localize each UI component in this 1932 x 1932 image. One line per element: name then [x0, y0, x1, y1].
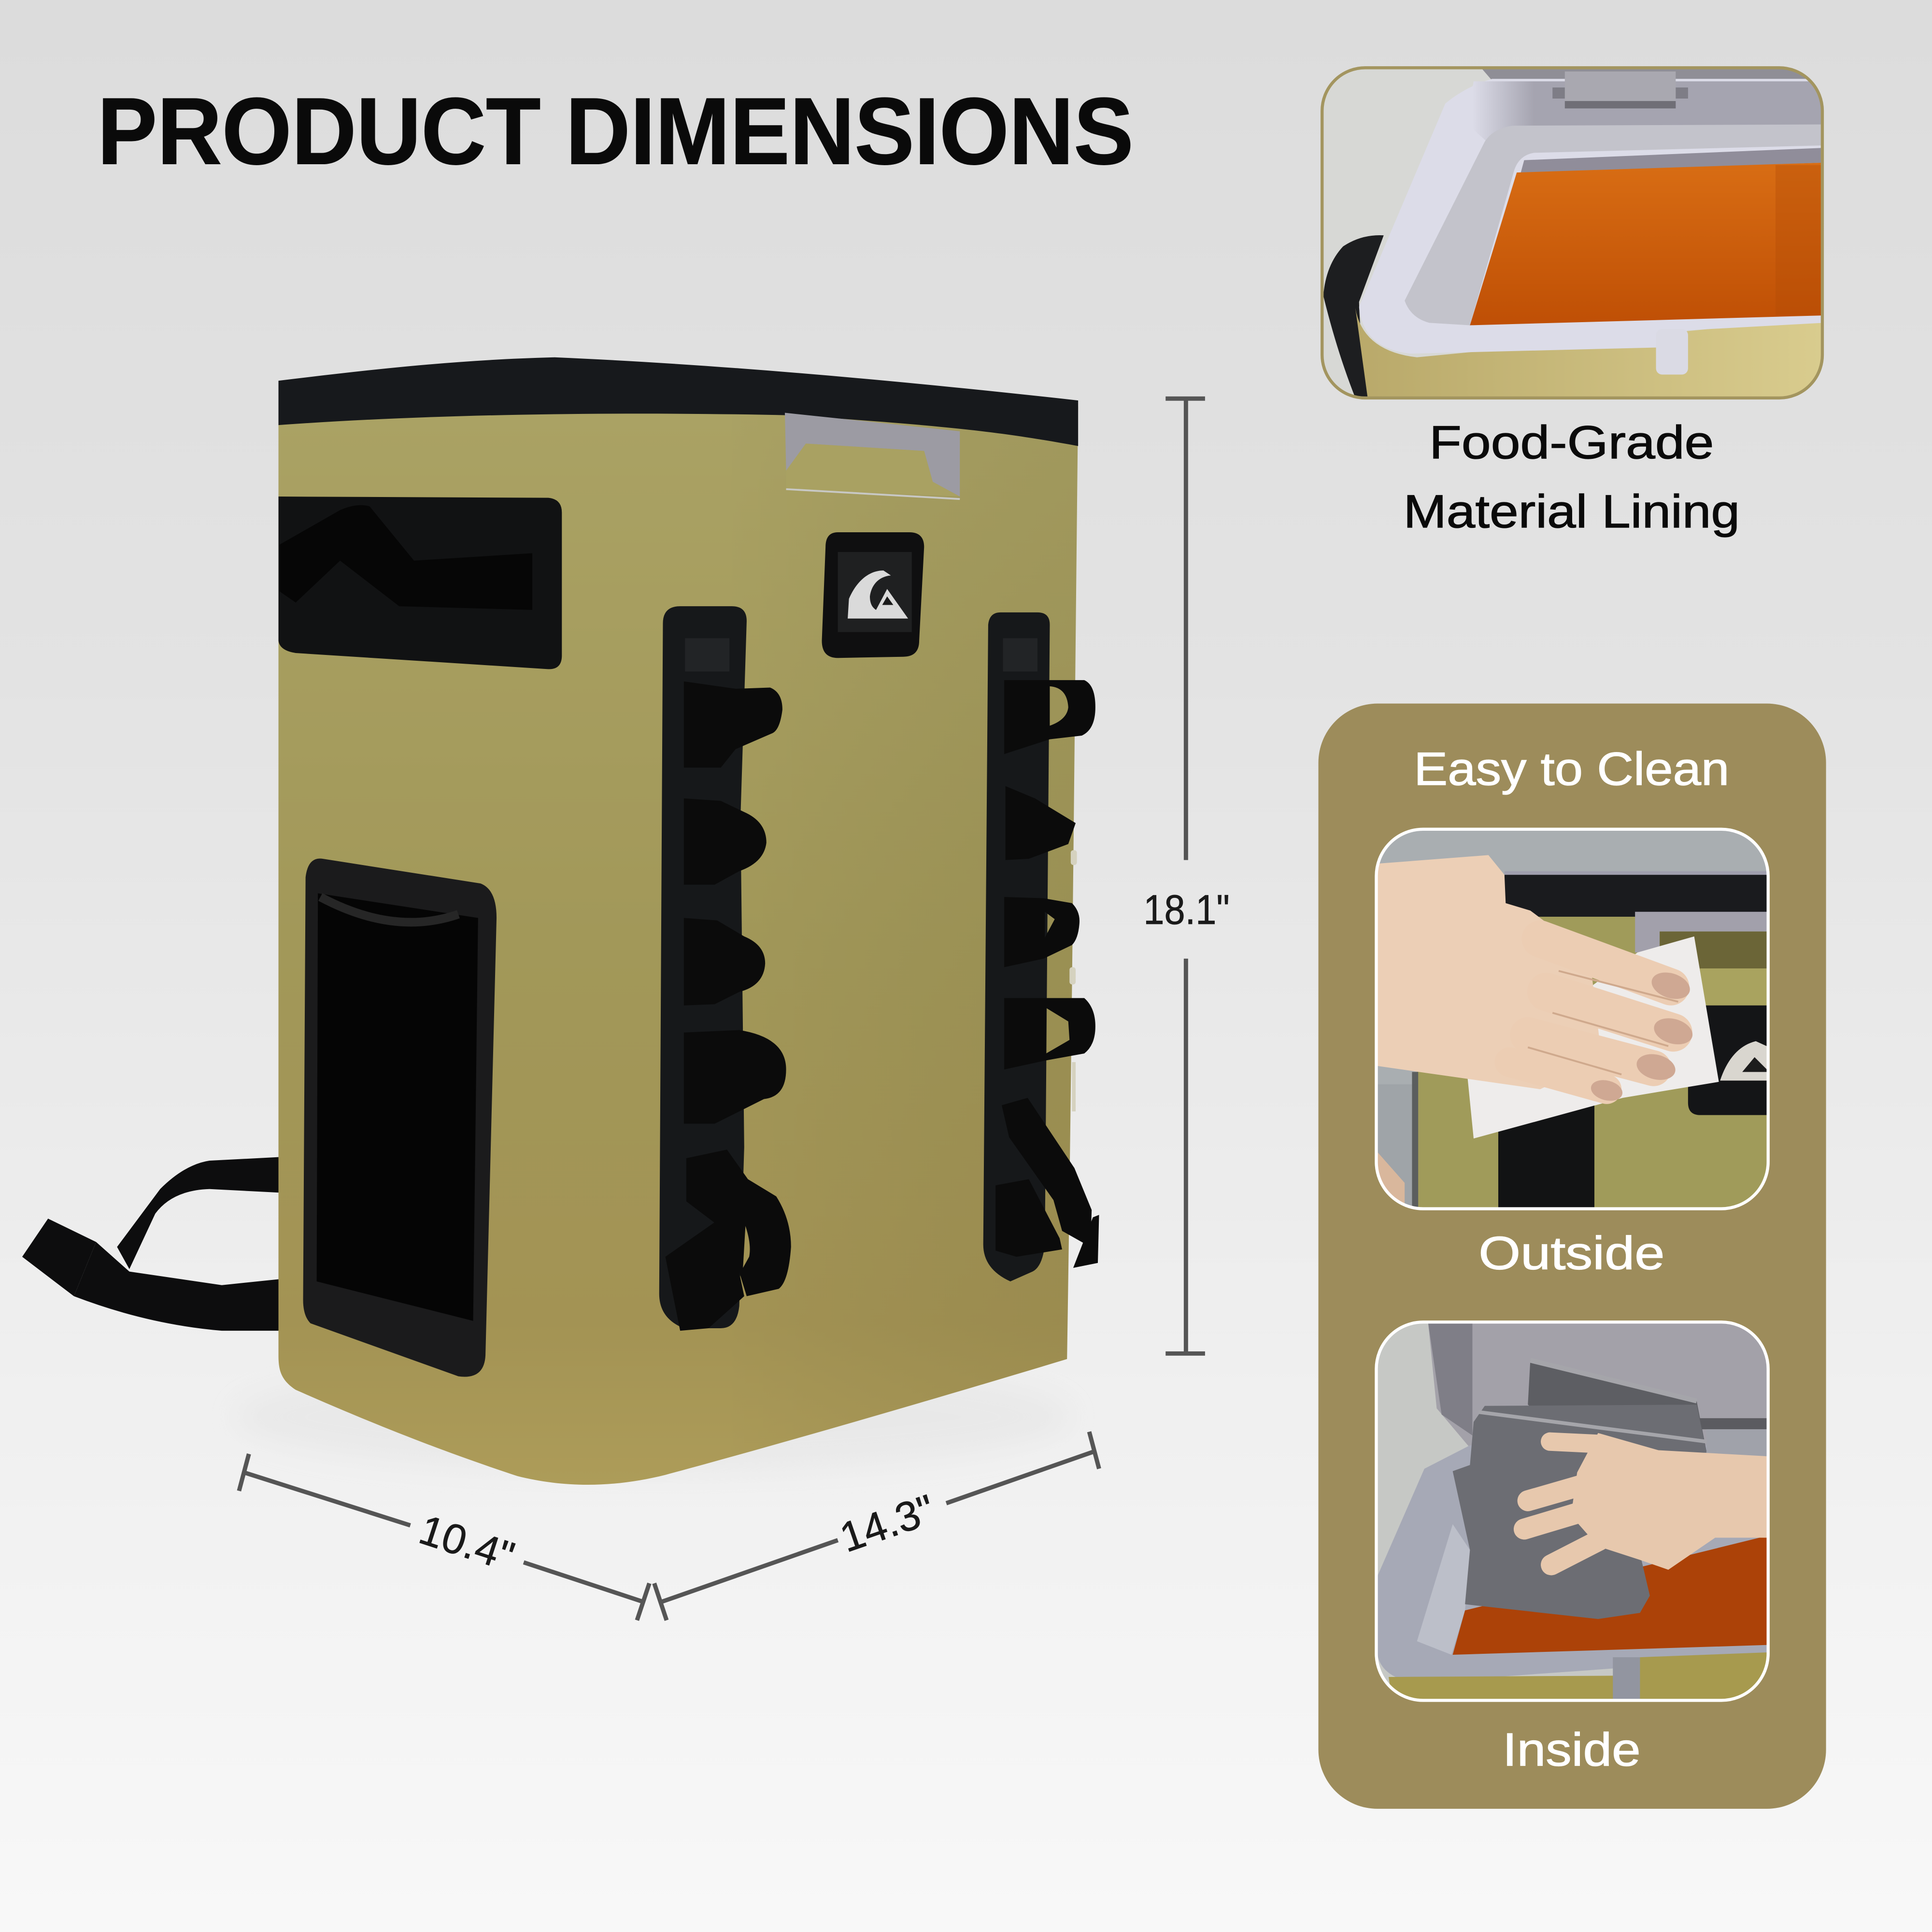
webbing loops [666, 682, 791, 1331]
depth dimension [239, 1454, 649, 1620]
hand [1376, 855, 1696, 1104]
latch [1613, 1657, 1640, 1702]
product: backpack cooler [22, 357, 1099, 1485]
height label: 18.1" [1143, 886, 1230, 933]
webbing loops [995, 680, 1099, 1268]
lid [279, 357, 1078, 446]
width dimension [654, 1432, 1099, 1620]
width label: 14.3" [834, 1486, 940, 1561]
strap [1498, 1103, 1594, 1210]
mesh side pocket [303, 859, 497, 1377]
hand [1524, 1433, 1769, 1570]
photo: inside wipe [1376, 1322, 1769, 1702]
height dimension [1143, 398, 1230, 1354]
label: inside: Inside [1503, 1723, 1641, 1776]
shoulder strap [1323, 235, 1384, 398]
handle [1635, 912, 1769, 952]
side handle patch [279, 497, 562, 669]
top carry handle [785, 413, 960, 499]
bag body [279, 400, 1078, 1485]
brand patch [822, 532, 924, 658]
right webbing panel [983, 612, 1099, 1281]
yellow shell [1389, 1652, 1769, 1702]
towel [1453, 1360, 1706, 1619]
side print marks [1069, 850, 1077, 1111]
caption: food-grade lining [1404, 416, 1740, 538]
latch tab [1656, 329, 1688, 375]
panel: easy to clean [1319, 704, 1826, 1809]
bag front [1417, 914, 1769, 1210]
orange lining [1453, 1535, 1769, 1655]
wipe [1467, 937, 1719, 1138]
orange lining [1470, 163, 1824, 325]
inner gasket [1405, 125, 1824, 325]
outer rim [1359, 79, 1824, 354]
label: outside: Outside [1478, 1227, 1664, 1279]
hinge [1552, 71, 1688, 108]
open lid [1428, 1322, 1769, 1448]
photo: food-grade lining [1322, 68, 1824, 398]
title: PRODUCT DIMENSIONS [98, 78, 1134, 184]
shoulder strap [22, 1157, 281, 1331]
depth label: 10.4" [414, 1506, 520, 1580]
yellow shell [1355, 308, 1824, 398]
open lid [1482, 70, 1805, 79]
rim [1376, 1445, 1769, 1678]
caption: food-grade lining: Food-Grade [1429, 416, 1714, 469]
left webbing panel [659, 606, 791, 1331]
photo: outside wipe [1376, 829, 1769, 1214]
logo [848, 570, 908, 619]
floor shadow [234, 1362, 1072, 1472]
logo patch [1688, 1006, 1769, 1115]
caption: food-grade lining: Material Lining [1404, 485, 1740, 538]
panel heading: Easy to Clean [1414, 742, 1729, 795]
